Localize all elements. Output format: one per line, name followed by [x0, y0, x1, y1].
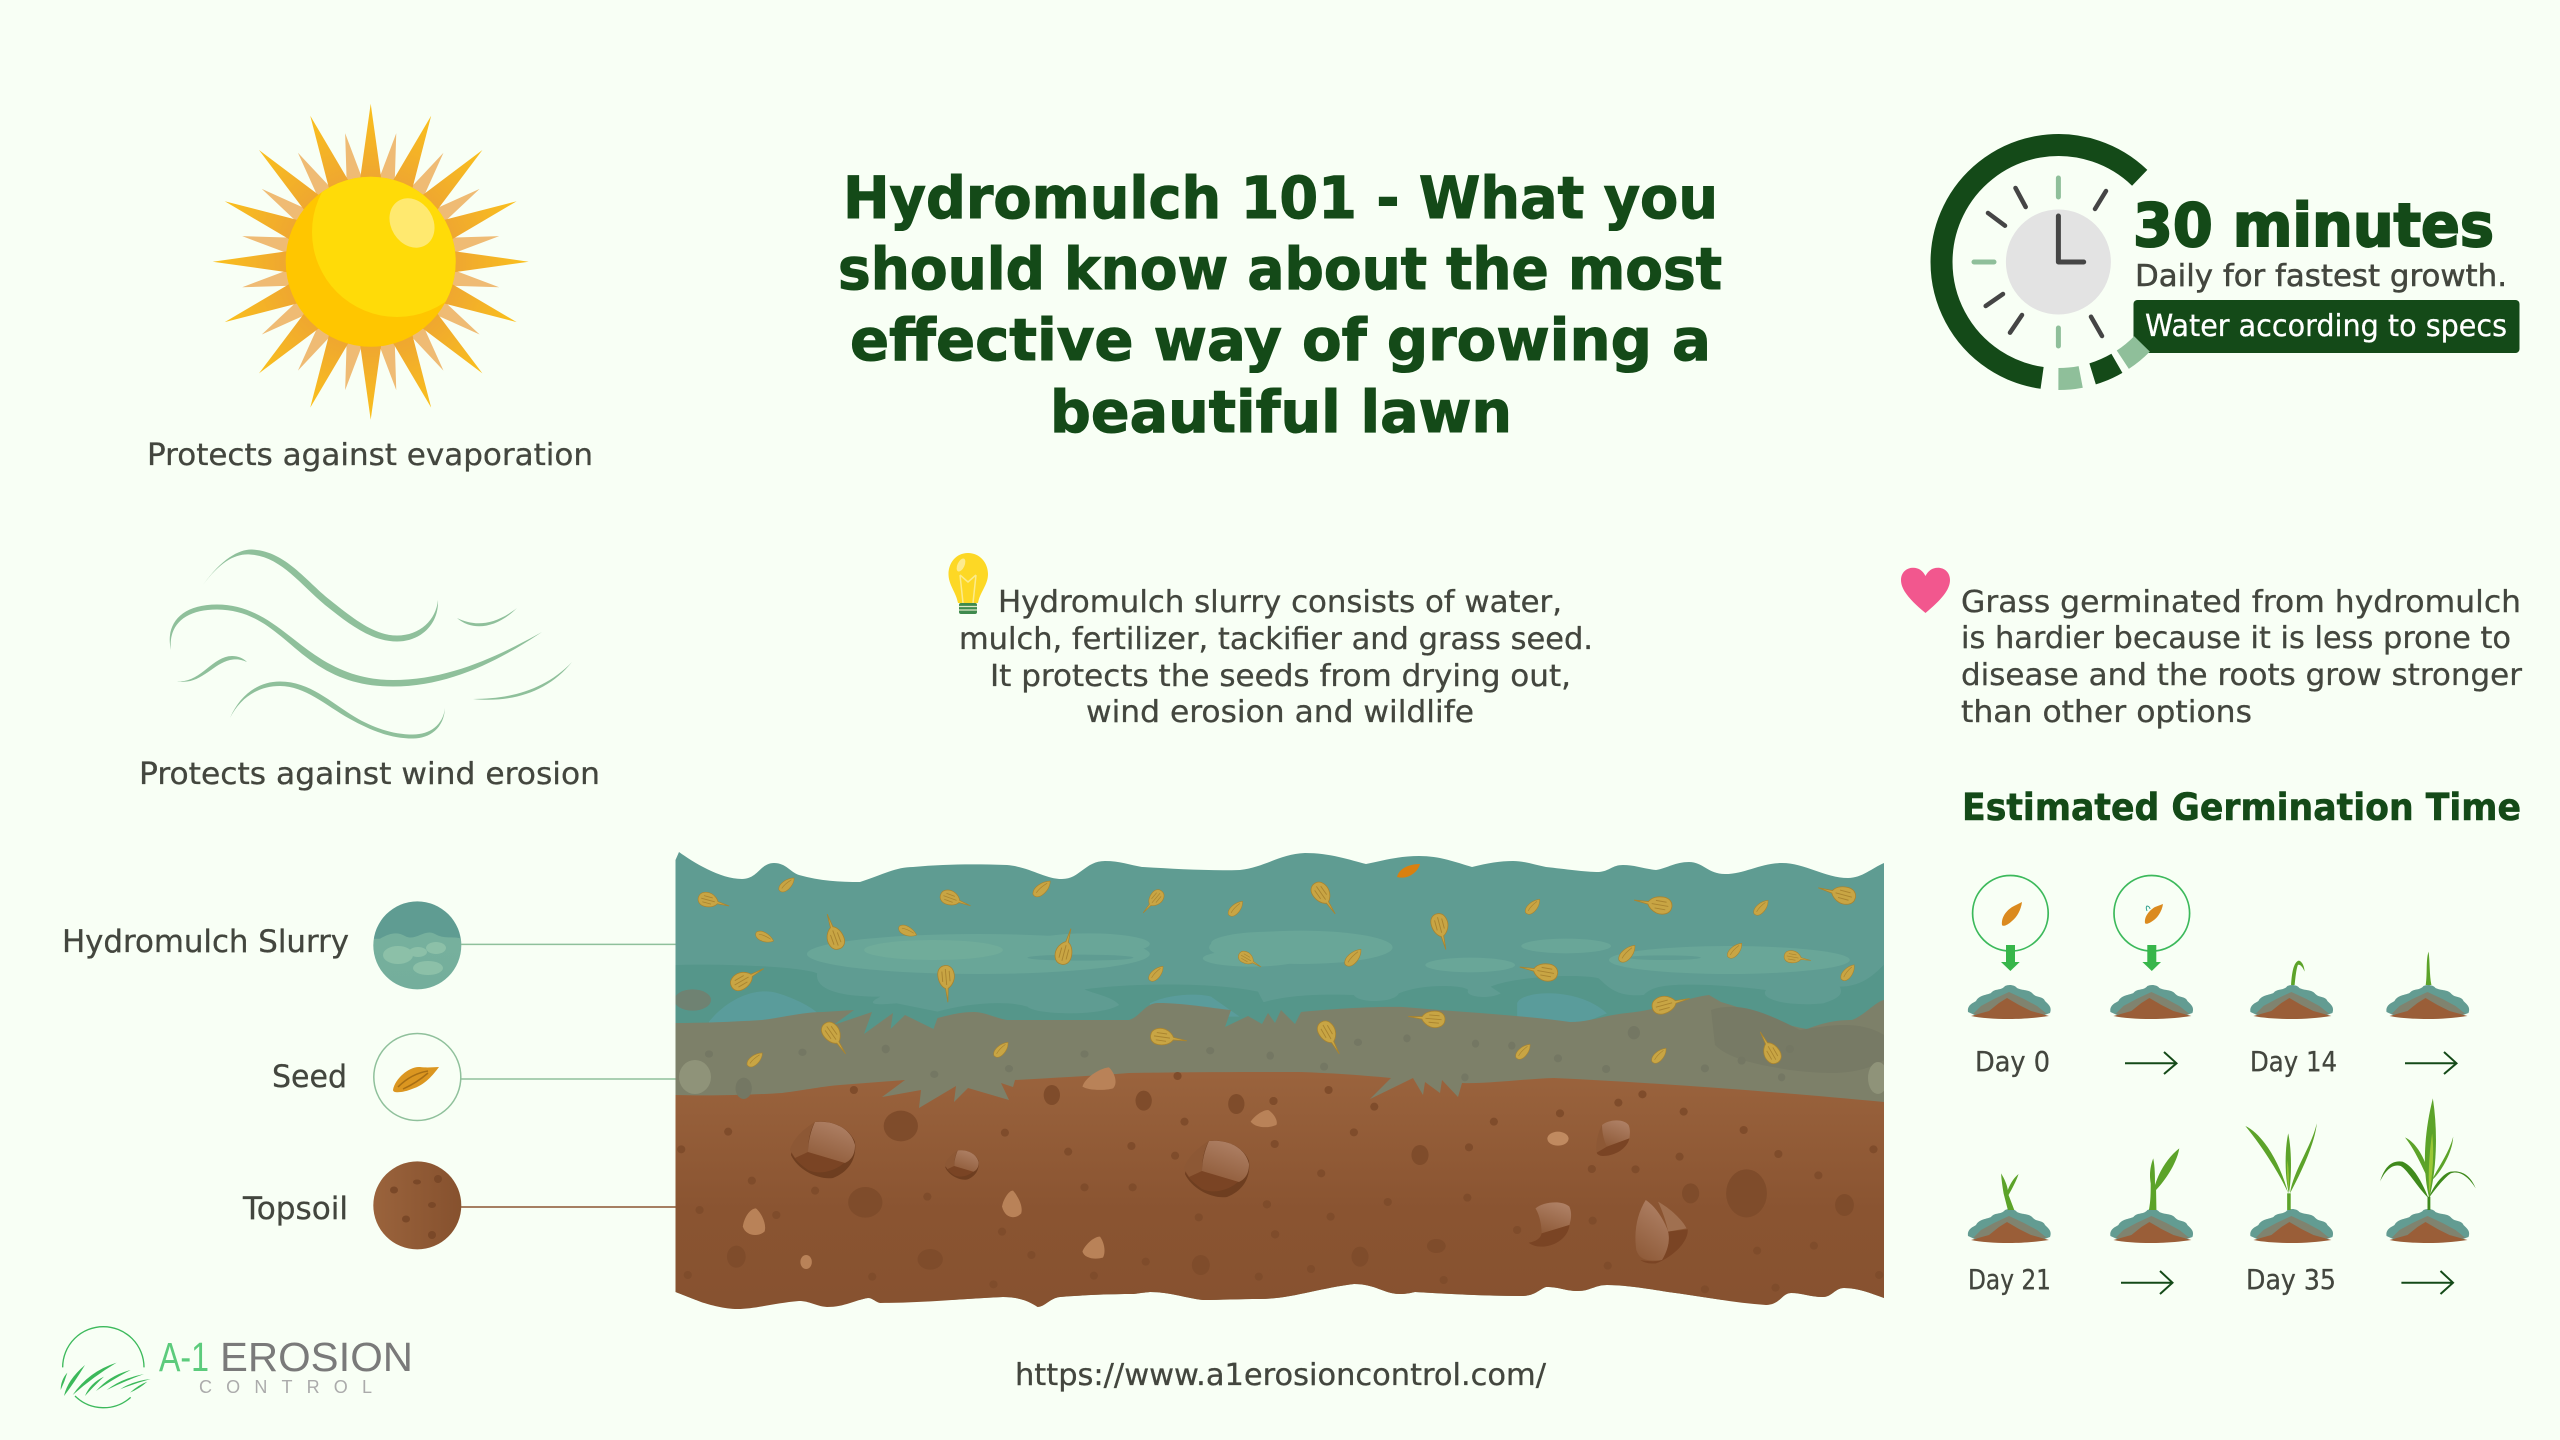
text: daily for fastest growth: Daily for fastest growth. [2135, 259, 2507, 294]
soil mounds [1968, 985, 2469, 1243]
arrow [2405, 1052, 2456, 1074]
clock ring accent [2123, 344, 2142, 360]
url: https://www.a1erosioncontrol.com/ [1015, 1358, 1547, 1393]
legend item: topsoil [242, 1161, 676, 1249]
heading: 30 minutes: 30 minutes [2133, 191, 2494, 261]
text: slurry description [959, 585, 1593, 730]
label: protects against wind erosion: Protects against wind erosion [139, 757, 600, 792]
title: should know about the most [838, 235, 1722, 303]
logo: A-1 Erosion Control: CONTROL [199, 1377, 372, 1397]
legend item: hydromulch slurry [62, 901, 676, 989]
legend item: seed [272, 1034, 676, 1120]
seeds in layers [697, 864, 1859, 1068]
logo: A-1 Erosion Control [61, 1327, 413, 1408]
arrow [2401, 1271, 2453, 1294]
title: effective way of growing a [850, 306, 1711, 374]
clock callout [1942, 145, 2520, 379]
illustration: soil cross-section [670, 845, 1890, 1320]
legend item: hydromulch slurry: Hydromulch Slurry [62, 924, 349, 960]
icon: heart [1901, 568, 1950, 613]
text: hardier grass: than other options [1961, 695, 2252, 730]
arrow [2125, 1052, 2176, 1074]
arrow [2121, 1271, 2172, 1294]
label: day 14: Day 14 [2250, 1046, 2337, 1078]
soil specks [677, 1026, 1883, 1293]
text: hardier grass [1961, 585, 2523, 730]
text: hardier grass: Grass germinated from hydromulch [1961, 585, 2521, 620]
legend: layers [62, 901, 676, 1249]
text: hardier grass: disease and the roots grow stronger [1961, 658, 2523, 693]
text: hardier grass: is hardier because it is less prone to [1961, 621, 2511, 656]
legend item: topsoil: Topsoil [242, 1191, 348, 1227]
label: day 0: Day 0 [1975, 1046, 2050, 1078]
wordmark: A-1 [159, 1334, 209, 1380]
icon: sun [213, 104, 529, 420]
icon: logo grass circle [61, 1327, 151, 1408]
icon: wind [170, 549, 572, 738]
text: slurry description: mulch, fertilizer, tackifier and grass seed. [959, 622, 1593, 657]
title [838, 164, 1722, 446]
text: slurry description: Hydromulch slurry consists of water, [998, 585, 1562, 620]
text: slurry description: It protects the seeds from drying out, [990, 659, 1571, 694]
logo: A-1 Erosion Control: EROSION [220, 1334, 413, 1380]
rocks [790, 1120, 1688, 1263]
title: beautiful lawn [1050, 378, 1512, 446]
icon: clock [1942, 145, 2140, 379]
badge: water according to specs [2134, 300, 2520, 353]
legend item: seed: Seed [272, 1059, 347, 1095]
heading: estimated germination time: Estimated Germination Time [1962, 786, 2521, 829]
title: Hydromulch 101 - What you [843, 164, 1718, 232]
label: day 35: Day 35 [2246, 1264, 2336, 1296]
layer: topsoil [675, 1072, 1884, 1320]
label: day 21: Day 21 [1968, 1264, 2051, 1296]
label: protects against evaporation: Protects against evaporation [147, 438, 593, 473]
badge: water according to specs: Water according to specs [2145, 309, 2507, 344]
growing plants [2001, 952, 2476, 1210]
layer: hydromulch slurry [676, 852, 1884, 1034]
text: slurry description: wind erosion and wildlife [1086, 695, 1474, 730]
germination stages [1968, 876, 2476, 1296]
seed callouts with arrows [1973, 876, 2190, 971]
icon: light bulb [948, 553, 988, 614]
layer: mulch [675, 995, 1888, 1300]
